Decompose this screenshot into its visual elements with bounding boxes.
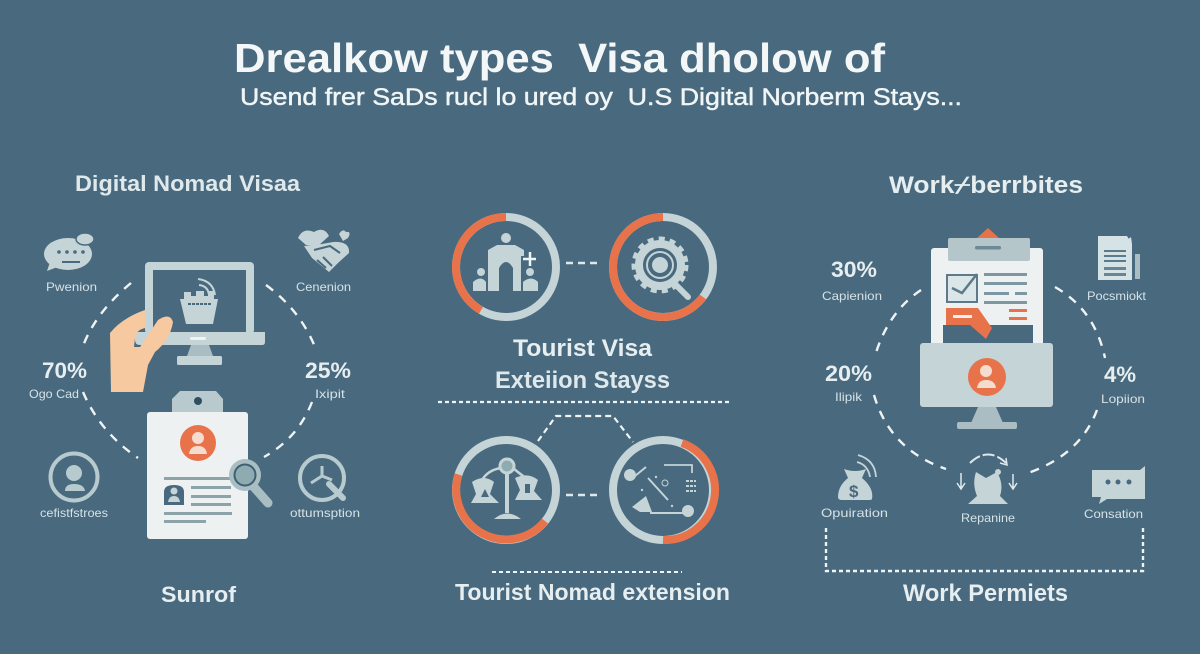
icon: cycle arrows (957, 454, 1017, 504)
ring: scales (456, 440, 556, 540)
label: pocsmiokt: Pocsmiokt (1087, 289, 1147, 303)
heading: tourist visa: Tourist Visa (513, 335, 653, 362)
icon: clock magnifier (300, 456, 344, 500)
dashed orbit (874, 287, 1105, 473)
icon: laptop with hand (110, 262, 265, 392)
icon: speech bubble (44, 233, 94, 271)
icon: chat bubble (1092, 466, 1145, 504)
divider dashes (438, 401, 732, 403)
connector dashes (566, 494, 600, 496)
ring: tools collage (613, 440, 715, 540)
label: ilipik: Ilipik (835, 390, 863, 404)
ring: landmark and people (456, 217, 556, 317)
label: lopiion: Lopiion (1101, 392, 1145, 406)
dashed bracket (826, 528, 1143, 571)
icon: id card with magnifier (147, 391, 268, 539)
label: ixipit: Ixipit (315, 387, 346, 401)
label: cenenion: Cenenion (296, 280, 351, 294)
stat: 20%: 20% (825, 361, 872, 386)
label: opuiration: Opuiration (821, 506, 888, 520)
panel: tourist visa (438, 217, 732, 605)
panel: work permits (821, 172, 1147, 607)
label: pwenion: Pwenion (46, 280, 97, 294)
panel: digital nomad visa (29, 171, 360, 607)
stat: 30%: 30% (831, 257, 877, 282)
label: capienion: Capienion (822, 289, 882, 303)
title: Drealkow types Visa dholow of (234, 35, 885, 81)
heading: digital nomad visa: Digital Nomad Visaa (75, 171, 301, 196)
icon: money bag: $ (849, 482, 859, 501)
connector dashes (566, 262, 600, 264)
heading: work benefits: Work⌿berrbites (889, 172, 1083, 199)
stat: 25%: 25% (305, 358, 351, 383)
connector bridge (538, 416, 633, 442)
label: ottumsption: ottumsption (290, 506, 360, 520)
icon: document (1098, 236, 1140, 280)
caption: sunrof: Sunrof (161, 582, 237, 607)
icon: clipboard on monitor (920, 228, 1053, 429)
stat: 4%: 4% (1104, 362, 1136, 387)
icon: money bag (838, 455, 876, 501)
caption: tourist nomad extension: Tourist Nomad extension (455, 579, 730, 605)
label: repanine: Repanine (961, 511, 1015, 525)
caption: work permits: Work Permiets (903, 580, 1068, 607)
stat: 70%: 70% (42, 358, 87, 383)
dashed orbit (83, 283, 315, 458)
label: cefistfstroes: cefistfstroes (40, 506, 108, 520)
label: consation: Consation (1084, 507, 1143, 521)
heading: extension stays: Exteiion Stayss (495, 367, 670, 394)
divider dashes (492, 571, 682, 573)
ring: gear and magnifier (613, 217, 713, 317)
subtitle: Usend frer SaDs rucl lo ured oy U.S Digital Norberm Stays... (240, 84, 962, 111)
label: ogo cad: Ogo Cad (29, 387, 79, 401)
icon: person ring (50, 454, 98, 500)
icon: heart handshake (298, 230, 350, 272)
